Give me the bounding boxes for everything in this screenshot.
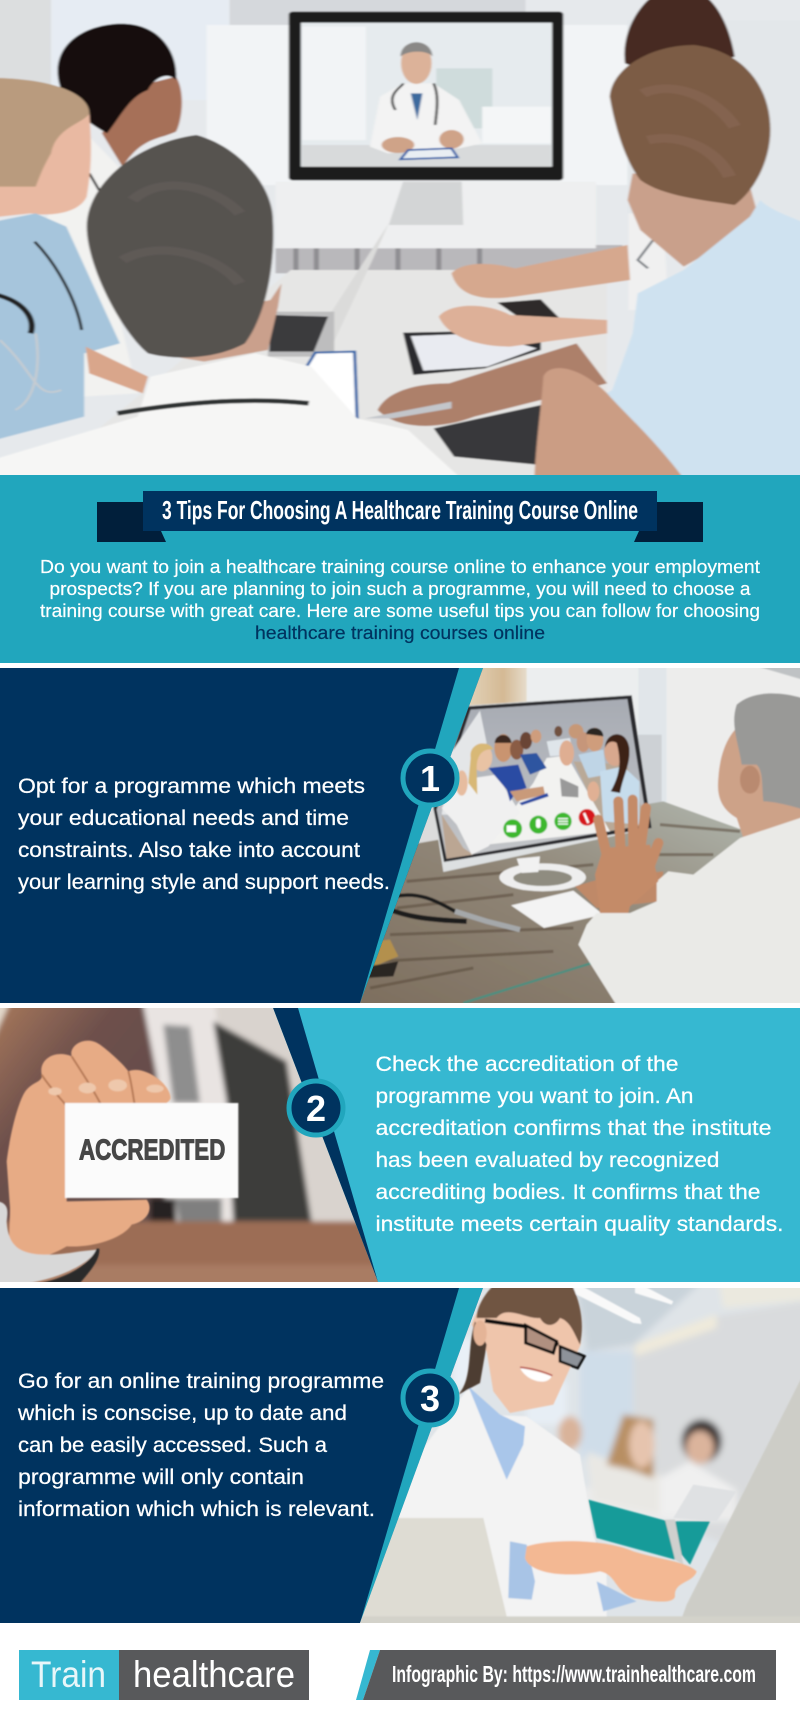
hero: blue clipboard [304,350,360,420]
tip 2 text: programme you want to join. An [376,1085,694,1108]
logo: Train healthcare: healthcare [133,1654,295,1695]
intro text: prospects? If you are planning to join such a programme, you will need to choose a [50,579,752,599]
hero photo: doctors on a video call [0,0,800,500]
tip 1 photo [360,668,800,1003]
tip 2 photo [0,1008,378,1282]
tip 1 text: your educational needs and time [18,807,349,830]
tip 2 text: accrediting bodies. It confirms that the [376,1181,760,1204]
tip 1 text [18,775,390,894]
tip 3 text: programme will only contain [18,1466,304,1489]
tip 3 text: which is conscise, up to date and [17,1402,347,1425]
tip 3 number badge: 3 [420,1378,440,1419]
tip 3 photo [360,1288,800,1623]
tip 3 number badge [403,1371,457,1425]
tip 1: man in white coat [575,693,800,1021]
panel: tip 1 [0,655,800,1021]
tip 1 number badge [403,751,457,805]
tip 2 number badge [289,1081,343,1135]
hero: man with brown hair [531,45,800,500]
intro text: Do you want to join a healthcare training course online to enhance your employment [40,557,760,577]
footer credit banner [356,1650,776,1700]
intro text [40,557,760,643]
tip 3: laptop [682,1380,800,1617]
tip 1: keyboard [511,891,603,928]
tip 2 text [376,1053,784,1236]
accredited label: ACCREDITED [79,1134,225,1166]
hero: nurse with blonde hair [0,78,148,447]
tip 2 text: Check the accreditation of the [376,1053,678,1076]
tip 2 text: institute meets certain quality standards. [376,1213,784,1236]
intro text: training course with great care. Here are some useful tips you can follow for choosing [40,601,760,621]
hero: monitor [289,12,563,180]
tip 2: hand and card [0,1041,238,1285]
tip 3 text: can be easily accessed. Such a [18,1434,327,1457]
tip 1: monitor on desk [433,695,652,891]
tip 1 text: Opt for a programme which meets [18,775,365,798]
tip 1: stethoscope [390,895,520,930]
tip 2 number badge: 2 [306,1088,326,1129]
panel: tip 3 [0,1288,800,1623]
tip 3 text: information which which is relevant. [18,1498,375,1521]
tip 1: people on screen [442,724,639,855]
tip 2 text: accreditation confirms that the institute [376,1117,772,1140]
tip 1 text: constraints. Also take into account [18,839,360,862]
intro panel [0,475,800,663]
intro text: healthcare training courses online [255,623,545,643]
title ribbon [97,491,703,542]
tip 3 text: Go for an online training programme [18,1370,384,1393]
tip 1 text: your learning style and support needs. [18,871,390,894]
hero: woman with black hair [46,24,182,397]
tip 3: foreground desk [353,1518,513,1641]
hero: arms on table [365,245,630,426]
hero: man with grey hair [0,134,457,475]
logo: Train healthcare: Train [31,1654,106,1695]
panel: tip 2 [0,1008,800,1282]
logo: Train healthcare [19,1650,309,1700]
tip 1: call buttons [503,809,595,838]
tip 3 text [17,1370,384,1521]
tip 2 text: has been evaluated by recognized [376,1149,720,1172]
tip 3: woman in lab coat [397,1275,697,1616]
hero: laptop [268,223,541,465]
hero: back woman [624,0,735,310]
tip 1 number badge: 1 [420,758,440,799]
